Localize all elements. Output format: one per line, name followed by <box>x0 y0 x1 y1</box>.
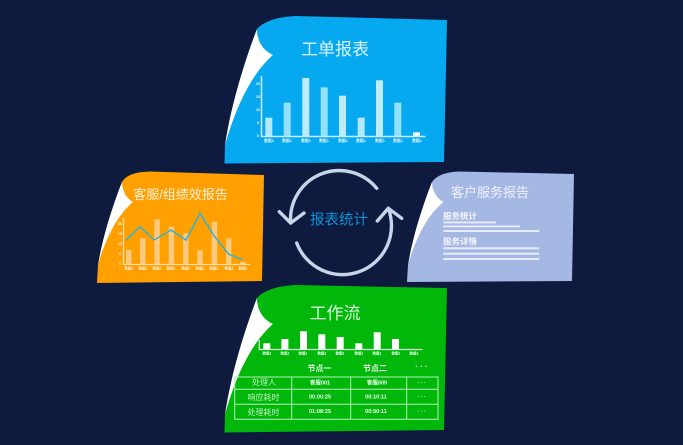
bar chart: 工单: 10 <box>256 108 260 112</box>
bar chart: 工作流: 数据1 <box>355 350 364 356</box>
combo chart: 绩效: 20 <box>118 222 122 226</box>
panel background: blue <box>224 16 447 164</box>
table: 节点: 处理耗时 <box>248 407 280 417</box>
combo chart: 绩效: 数据1 <box>139 266 148 270</box>
combo chart: 绩效: 数据1 <box>125 266 134 270</box>
combo chart: 绩效: 数据1 <box>196 266 205 270</box>
bar chart: 工作流: 数据1 <box>263 350 272 356</box>
combo chart: 绩效 <box>118 213 250 270</box>
bar chart: 工单: 数据1 <box>301 138 311 143</box>
combo chart: 绩效: 数据1 <box>167 266 176 270</box>
bar chart: 工单: 数据1 <box>393 138 403 143</box>
table: 节点: · · · <box>417 394 426 400</box>
panel: 客户服务报告 <box>407 172 574 282</box>
bar chart: 工单: 20 <box>256 82 260 86</box>
table: 节点: 响应耗时 <box>248 392 280 402</box>
page curl: orange panel <box>98 182 133 265</box>
page curl: lavender panel <box>408 182 444 265</box>
table: 节点: 节点一 <box>308 363 332 373</box>
table: 节点: 客服009 <box>367 378 387 386</box>
combo chart: 绩效: 5 <box>119 252 121 256</box>
bar chart: 工作流: 数据1 <box>336 350 345 356</box>
bar chart: 工作流: 数据1 <box>410 350 419 356</box>
combo chart: 绩效: 10 <box>118 242 122 246</box>
combo chart: 绩效: 数据1 <box>210 266 219 270</box>
heading: 客服/组绩效报告: 客服/组绩效报告 <box>133 187 228 202</box>
text block: 服务统计: 服务统计 <box>443 211 478 221</box>
arrow: lower loop <box>297 208 402 275</box>
heading: 工作流: 工作流 <box>310 304 360 323</box>
table: 节点: · · · <box>417 380 426 386</box>
combo chart: 绩效: 数据1 <box>153 266 162 270</box>
panel background: orange <box>97 172 264 283</box>
center label: 报表统计: 报表统计 <box>310 212 368 228</box>
heading: 工单报表: 工单报表 <box>301 40 369 59</box>
table: 节点: · · · <box>417 409 426 415</box>
page curl: blue panel <box>225 29 273 145</box>
combo chart: 绩效: 数据1 <box>182 266 191 270</box>
bar chart: 工单: 数据1 <box>338 138 348 143</box>
bar chart: 工作流 <box>259 331 423 356</box>
bar chart: 工单: 数据1 <box>412 138 422 143</box>
bar chart: 工作流: 数据1 <box>392 350 401 356</box>
combo chart: 绩效: 数据1 <box>239 266 248 270</box>
table: 节点: 00:50:11 <box>365 409 387 415</box>
text block: 服务统计 <box>443 211 539 232</box>
arrow: upper loop <box>279 171 377 223</box>
panel background: green <box>224 285 447 432</box>
bar chart: 工作流: 数据1 <box>281 350 290 356</box>
combo chart: 绩效: 数据1 <box>225 266 234 270</box>
bar chart: 工单: 0 <box>257 134 259 138</box>
table: 节点: 00:10:11 <box>365 394 387 400</box>
combo chart: 绩效: 0 <box>119 262 121 266</box>
page curl: green panel <box>225 298 273 414</box>
text block: 服务详情: 服务详情 <box>443 236 478 246</box>
bar chart: 工单: 数据1 <box>319 138 329 143</box>
cycle diagram: center <box>279 171 402 275</box>
bar chart: 工单: 数据1 <box>282 138 292 143</box>
table: 节点: 客服001 <box>310 378 330 386</box>
bar chart: 工单: 15 <box>256 95 260 99</box>
table: 节点: 01:08:25 <box>309 409 331 415</box>
bar chart: 工单 <box>256 76 426 143</box>
combo chart: 绩效: 15 <box>118 232 122 236</box>
panel: 客服/组绩效报告 <box>97 172 264 283</box>
bar chart: 工作流: 数据1 <box>318 350 327 356</box>
panel background: lavender <box>407 172 574 282</box>
bar chart: 工单: 数据1 <box>356 138 366 143</box>
table: 节点: 处理人 <box>252 377 276 387</box>
bar chart: 工作流: 数据1 <box>299 350 308 356</box>
bar chart: 工单: 数据1 <box>264 138 274 143</box>
panel: 工单报表 <box>224 16 447 164</box>
bar chart: 工单: 5 <box>257 121 259 125</box>
panel: 工作流 <box>224 285 447 432</box>
table: 节点: · · · <box>415 362 428 371</box>
table: 节点: 00:00:25 <box>309 394 331 400</box>
bar chart: 工作流: 数据1 <box>373 350 382 356</box>
text block: 服务详情 <box>443 236 539 260</box>
bar chart: 工单: 数据1 <box>375 138 385 143</box>
table: 节点: 节点二 <box>363 363 387 373</box>
heading: 客户服务报告: 客户服务报告 <box>451 185 529 200</box>
table: 节点 <box>235 362 438 419</box>
